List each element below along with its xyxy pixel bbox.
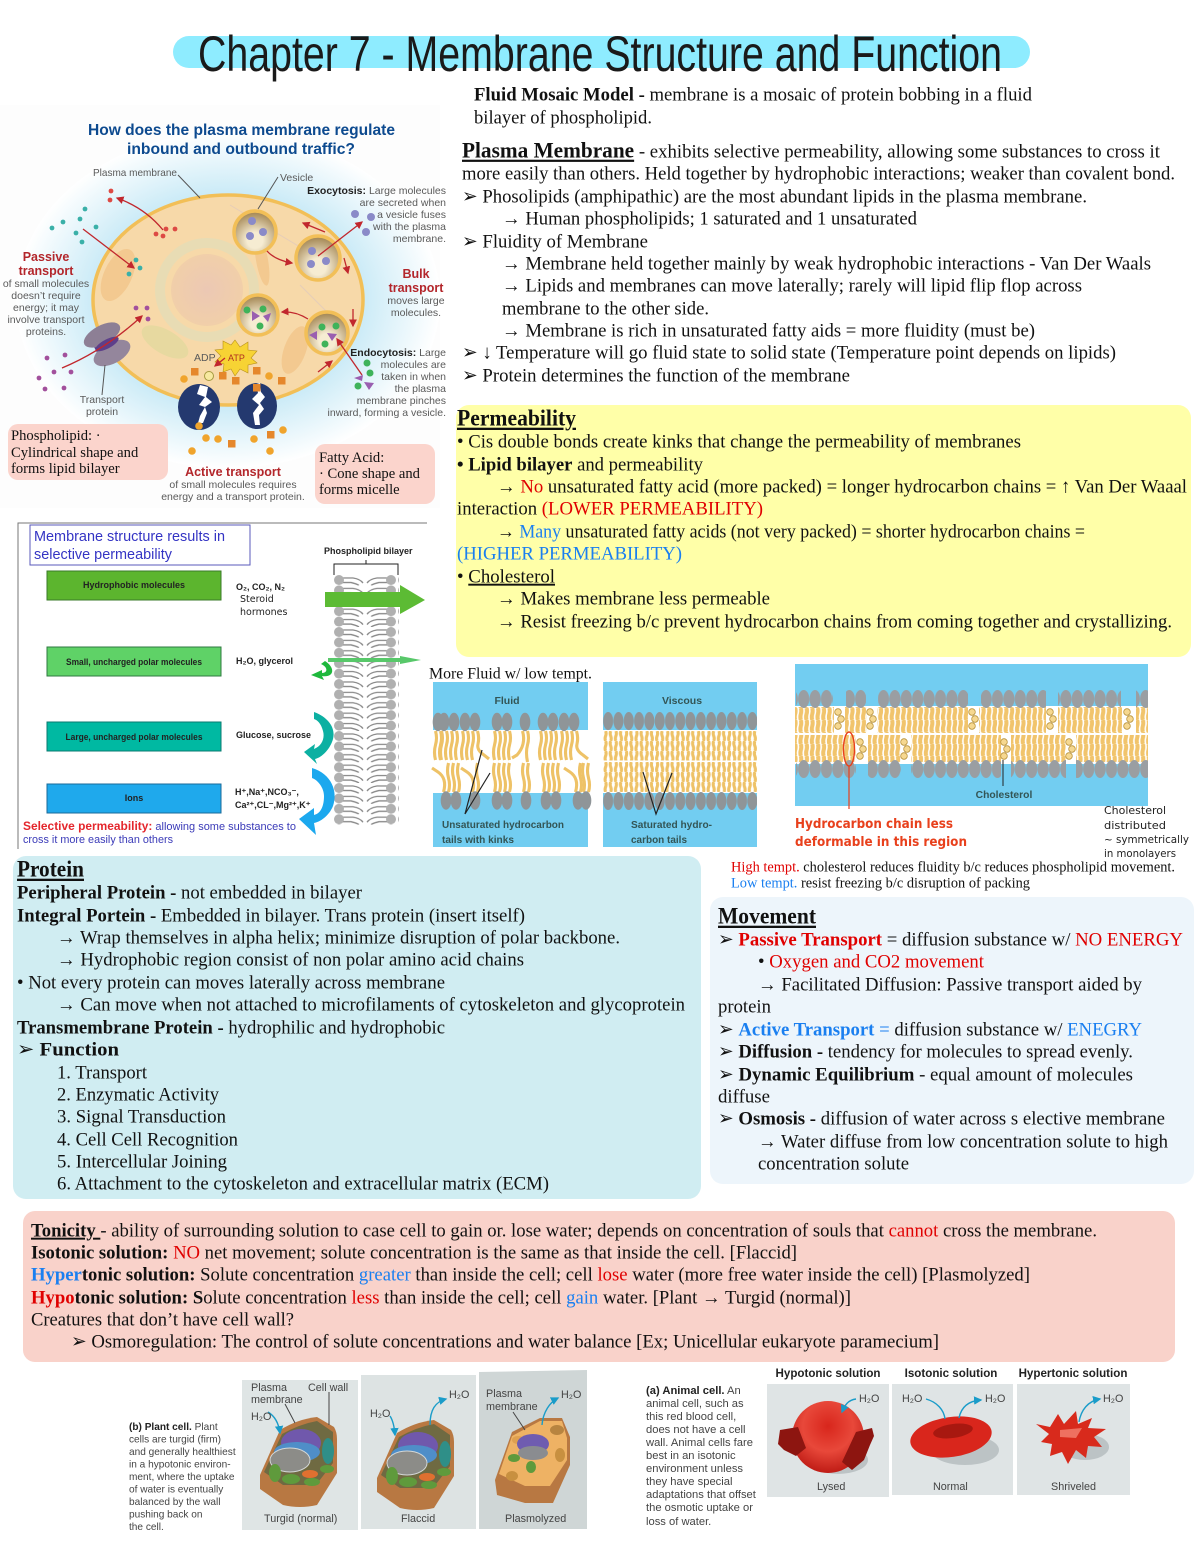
- diagram labels: molecules are: [381, 359, 446, 371]
- caption: animal cell: wall. Animal cells fare: [645, 1437, 753, 1449]
- caption: plant cell: the cell.: [129, 1522, 164, 1533]
- caption: animal cell: adaptations that offset: [646, 1489, 757, 1501]
- row: ions: Ca²⁺,CL⁻,Mg²⁺,K⁺: [235, 800, 311, 810]
- panel: permeability: → No unsaturated fatty acid (more packed) = longer hydrocarbon chains = ↑ Van Der Waaal: [497, 477, 1187, 498]
- panel: movement: → Water diffuse from low concentration solute to high: [758, 1132, 1168, 1153]
- panel: turgid cell: membrane: [251, 1394, 303, 1406]
- panel: permeability: (HIGHER PERMEABILITY): [457, 544, 682, 565]
- diagram labels: of small molecules: [3, 278, 89, 290]
- caption: selective permeability: [23, 821, 296, 846]
- heading: selective permeability box: selective permeability: [34, 547, 173, 563]
- diagram labels: are secreted when: [360, 197, 446, 209]
- panel: plasmolyzed cell: H₂O: [561, 1389, 581, 1401]
- callout: fatty acid: Fatty Acid:: [319, 450, 384, 466]
- diagram labels: Active transport: [185, 465, 282, 479]
- panel: permeability: • Cis double bonds create kinks that change the permeability of membranes: [457, 432, 1021, 453]
- caption: animal cell: they have special: [646, 1476, 732, 1488]
- panel: movement: concentration solute: [758, 1154, 909, 1175]
- diagram labels: membrane.: [393, 233, 446, 245]
- panel: turgid cell: Plasma: [251, 1382, 287, 1394]
- panel: tonicity: Isotonic solution: NO net movement; solute concentration is the same as that inside the cell. [Flaccid]: [31, 1243, 797, 1264]
- panel: protein: ➢ Function: [17, 1040, 119, 1061]
- label: cholesterol distributed: in monolayers: [1104, 848, 1176, 860]
- panel: movement: ➢ Osmosis - diffusion of water across s elective membrane: [718, 1109, 1165, 1130]
- heading: diagram question: [88, 122, 395, 158]
- text block: plasma membrane: → Lipids and membranes can move laterally; rarely will lipid flip flop across: [502, 276, 1082, 297]
- diagram labels: inward, forming a vesicle.: [328, 407, 446, 419]
- panel: movement: [710, 897, 1194, 1184]
- caption: animal cell: environment unless: [646, 1463, 743, 1475]
- diagram labels: Bulk: [402, 267, 430, 281]
- chart: selective permeability: [18, 523, 427, 849]
- diagram labels: Plasma membrane: [93, 167, 177, 179]
- panel: normal cell: H₂O: [985, 1393, 1005, 1405]
- heading: diagram question: inbound and outbound traffic?: [127, 141, 355, 158]
- diagram: fluid membrane: [432, 682, 591, 847]
- row: hydrophobic molecules: Hydrophobic molecules: [83, 580, 185, 590]
- caption: animal cell: loss of water.: [646, 1516, 711, 1528]
- column headings: Hypertonic solution: [1019, 1367, 1127, 1380]
- callout: phospholipid: Cylindrical shape and: [11, 445, 139, 461]
- row: hydrophobic molecules: hormones: [240, 607, 288, 618]
- diagram: viscous membrane: carbon tails: [631, 835, 687, 846]
- diagram labels: involve transport: [7, 314, 85, 326]
- arrow: passes through: [325, 585, 425, 614]
- panel: turgid cell: [242, 1380, 358, 1530]
- row: hydrophobic molecules: Steroid: [240, 594, 274, 605]
- text block: plasma membrane: [462, 138, 1175, 387]
- phospholipid bilayer column: [324, 546, 413, 825]
- panel: turgid cell: H₂O: [251, 1411, 271, 1423]
- diagram labels: proteins.: [26, 326, 66, 338]
- diagram labels: transport: [389, 281, 444, 295]
- text block: temperature notes: Low tempt. resist freezing b/c disruption of packing: [731, 876, 1031, 892]
- panel: permeability: • Lipid bilayer and permeability: [457, 455, 703, 476]
- diagram: cholesterol membrane: [795, 664, 1189, 860]
- gaps around cholesterol: [834, 706, 1136, 764]
- label: hydrocarbon chain: Hydrocarbon chain less: [795, 817, 953, 832]
- diagram labels: protein: [86, 406, 118, 418]
- diagram labels: Passive: [23, 250, 69, 264]
- panel: movement: protein: [718, 997, 771, 1018]
- vesicles: [234, 211, 348, 354]
- lipid tails and heads: [432, 713, 591, 810]
- diagram: fluid membrane: Fluid: [494, 695, 520, 707]
- panel: tonicity: ➢ Osmoregulation: The control of solute concentrations and water balance [Ex; Unicellular eukaryote paramecium]: [71, 1332, 939, 1353]
- callout: phospholipid: Phospholipid: ·: [11, 428, 101, 444]
- callout: phospholipid: [8, 424, 168, 480]
- panel: protein: Integral Portein - Embedded in bilayer. Trans protein (insert itself): [17, 906, 525, 927]
- panel: protein: 5. Intercellular Joining: [57, 1152, 227, 1173]
- text block: temperature notes: High tempt. cholesterol reduces fluidity b/c reduces phospholipid movement.: [731, 860, 1175, 876]
- diagram labels: doesn’t require: [11, 290, 81, 302]
- panel: tonicity: Hypotonic solution: Solute concentration less than inside the cell; cell gain water. [Plant → Turgid (normal)]: [31, 1288, 851, 1309]
- panel: protein: 1. Transport: [57, 1063, 148, 1084]
- panel: plasmolyzed cell: [479, 1370, 587, 1529]
- text block: plasma membrane: Plasma Membrane - exhibits selective permeability, allowing some substances to cross it: [462, 138, 1161, 163]
- panel: lysed cell: Lysed: [817, 1481, 845, 1493]
- panel: tonicity: Creatures that don’t have cell wall?: [31, 1310, 294, 1331]
- caption: selective permeability: Selective permeability: allowing some substances to: [23, 821, 296, 833]
- label: cholesterol distributed: Cholesterol: [1104, 805, 1166, 817]
- cholesterol molecules: [835, 709, 1133, 759]
- diagram labels: moves large: [387, 295, 445, 307]
- panel: plasmolyzed cell: Plasma: [486, 1388, 522, 1400]
- diagram labels: a vesicle fuses: [377, 209, 446, 221]
- panel: flaccid cell: Flaccid: [401, 1513, 435, 1525]
- text block: fluid mosaic model: Fluid Mosaic Model - membrane is a mosaic of protein bobbing in a fluid: [474, 84, 1032, 105]
- panel: protein: • Not every protein can moves laterally across membrane: [17, 973, 445, 994]
- label: cholesterol distributed: [1104, 805, 1189, 860]
- diagram labels: the plasma: [395, 383, 446, 395]
- row: small uncharged polar: H₂O, glycerol: [236, 656, 293, 666]
- diagram labels: Exocytosis: Large molecules: [307, 185, 446, 197]
- caption: plant cell: [129, 1422, 236, 1533]
- cell body: [93, 195, 363, 405]
- caption: animal cell: does not have a cell: [646, 1424, 746, 1436]
- panel: movement: • Oxygen and CO2 movement: [758, 952, 985, 973]
- panel: protein: Peripheral Protein - not embedded in bilayer: [17, 883, 363, 904]
- arrow: green deflect: [311, 661, 332, 680]
- diagram: plant cells: [129, 1370, 587, 1533]
- text block: plasma membrane: ➢ Fluidity of Membrane: [462, 232, 648, 253]
- caption: plant cell: ment, where the uptake: [129, 1472, 235, 1483]
- diagram labels: ATP: [228, 353, 245, 363]
- caption: animal cell: (a) Animal cell. An: [646, 1385, 741, 1397]
- panel: turgid cell: Turgid (normal): [264, 1513, 337, 1525]
- heading: permeability: Permeability: [457, 406, 576, 431]
- panel: lysed cell: [767, 1384, 889, 1497]
- panel: flaccid cell: H₂O: [370, 1408, 390, 1420]
- callout: fatty acid: · Cone shape and: [319, 466, 421, 482]
- caption: animal cell: animal cell, such as: [646, 1398, 744, 1410]
- panel: permeability: • Cholesterol: [457, 567, 555, 588]
- label: hydrocarbon chain: [795, 817, 967, 850]
- panel: protein: 4. Cell Cell Recognition: [57, 1130, 238, 1151]
- panel: movement: ➢ Passive Transport = diffusion substance w/ NO ENERGY: [718, 930, 1183, 951]
- panel: permeability: [456, 405, 1191, 657]
- panel: tonicity: Tonicity - ability of surrounding solution to case cell to gain or. lose water; depends on concentration of souls that cannot cross the membrane.: [31, 1221, 1097, 1242]
- cargo molecules: [244, 210, 375, 390]
- text block: plasma membrane: → Membrane is rich in unsaturated fatty aids = more fluidity (must be): [502, 321, 1035, 342]
- caption: plant cell: pushing back on: [129, 1510, 203, 1520]
- text block: plasma membrane: ➢ ↓ Temperature will go fluid state to solid state (Temperature point depends on lipids): [462, 343, 1116, 364]
- row: large uncharged polar: Glucose, sucrose: [236, 730, 311, 740]
- lipid heads: [796, 690, 1148, 778]
- diagram labels: Endocytosis: Large: [350, 347, 446, 359]
- panel: protein: → Can move when not attached to microfilaments of cytoskeleton and glycoprotein: [57, 995, 685, 1016]
- diagram labels: taken in when: [381, 371, 446, 383]
- panel: movement: ➢ Diffusion - tendency for molecules to spread evenly.: [718, 1042, 1133, 1063]
- arrows: red transport arrows: [62, 198, 362, 375]
- text block: fluid mosaic model: [474, 84, 1032, 128]
- diagram labels: with the plasma: [372, 221, 446, 233]
- leader lines: [178, 175, 278, 209]
- column headings: [776, 1367, 1127, 1380]
- diagram: viscous membrane: [603, 682, 757, 847]
- diagram: fluid membrane: Unsaturated hydrocarbon: [442, 820, 564, 831]
- row: hydrophobic molecules: [47, 571, 288, 618]
- panel: protein: 2. Enzymatic Activity: [57, 1085, 219, 1106]
- diagram labels: ADP: [194, 352, 216, 364]
- arrow: small polar partial: [328, 656, 421, 664]
- diagram: plasma membrane traffic: [0, 105, 446, 508]
- text block: plasma membrane: more easily than others. Held together by hydrophobic interactions; weaker than covalent bond.: [462, 164, 1175, 185]
- heading: movement: Movement: [718, 904, 816, 929]
- text block: plasma membrane: ➢ Protein determines the function of the membrane: [462, 366, 850, 387]
- diagram labels: Transport: [80, 394, 124, 406]
- heading: protein: Protein: [17, 857, 84, 882]
- diagram: fluid membrane: tails with kinks: [442, 835, 514, 846]
- heading: selective permeability box: [30, 525, 250, 565]
- diagram labels: energy and a transport protein.: [161, 491, 305, 503]
- diagram labels: energy; it may: [13, 302, 80, 314]
- row: small uncharged polar: [47, 647, 293, 676]
- label: cholesterol distributed: distributed: [1104, 820, 1166, 832]
- caption: plant cell: cells are turgid (firm): [129, 1434, 221, 1446]
- heading: selective permeability box: Membrane structure results in: [34, 529, 225, 545]
- panel: movement: ➢ Dynamic Equilibrium - equal amount of molecules: [718, 1065, 1133, 1086]
- diagram: animal cells: [645, 1367, 1130, 1528]
- panel: permeability: → Resist freezing b/c prevent hydrocarbon chains from coming together and crystallizing.: [497, 612, 1172, 633]
- panel: normal cell: Normal: [933, 1481, 968, 1493]
- diagram labels: of small molecules requires: [169, 479, 297, 491]
- panel: shriveled cell: Shriveled: [1051, 1481, 1096, 1493]
- caption: animal cell: the osmotic uptake or: [646, 1502, 753, 1514]
- small molecules: passive transport: [37, 189, 177, 391]
- panel: plasmolyzed cell: Plasmolyzed: [505, 1513, 566, 1525]
- heading: diagram question: How does the plasma membrane regulate: [88, 122, 395, 139]
- panel: normal cell: [892, 1384, 1013, 1495]
- row: ions: [47, 784, 311, 813]
- panel: normal cell: H₂O: [902, 1393, 922, 1405]
- diagram: viscous membrane: Saturated hydro-: [631, 820, 713, 831]
- caption: animal cell: [645, 1385, 757, 1528]
- panel: tonicity: Hypertonic solution: Solute concentration greater than inside the cell; cell lose water (more free water inside the cell) [Plasmolyzed]: [31, 1265, 1030, 1286]
- diagram labels: Vesicle: [280, 172, 313, 184]
- diagram labels: transport: [19, 264, 74, 278]
- row: large uncharged polar: Large, uncharged polar molecules: [66, 732, 202, 742]
- panel: plasmolyzed cell: membrane: [486, 1401, 538, 1413]
- panel: flaccid cell: [361, 1375, 476, 1529]
- diagram labels: molecules.: [391, 307, 441, 319]
- caption: plant cell: (b) Plant cell. Plant: [129, 1422, 218, 1433]
- title: Chapter 7 - Membrane Structure and Function: [198, 26, 1002, 82]
- arrow: teal deflect: [304, 712, 334, 764]
- panel: movement: diffuse: [718, 1087, 770, 1108]
- caption: plant cell: balanced by the wall: [129, 1497, 220, 1508]
- panel: permeability: interaction (LOWER PERMEABILITY): [457, 499, 763, 520]
- text block: plasma membrane: → Human phospholipids; 1 saturated and 1 unsaturated: [502, 209, 917, 230]
- panel: protein: 3. Signal Transduction: [57, 1107, 226, 1128]
- panel: permeability: → Makes membrane less permeable: [497, 589, 770, 610]
- label: hydrocarbon chain: deformable in this region: [795, 835, 967, 850]
- panel: shriveled cell: H₂O: [1103, 1393, 1123, 1405]
- panel: protein: 6. Attachment to the cytoskeleton and extracellular matrix (ECM): [57, 1174, 549, 1195]
- panel: lysed cell: H₂O: [859, 1393, 879, 1405]
- caption: animal cell: best in an isotonic: [646, 1450, 736, 1462]
- label: more fluid: More Fluid w/ low tempt.: [429, 664, 592, 683]
- panel: protein: Transmembrane Protein - hydrophilic and hydrophobic: [17, 1018, 445, 1039]
- diagram: viscous membrane: Viscous: [662, 695, 702, 707]
- panel: protein: [13, 856, 701, 1199]
- panel: turgid cell: Cell wall: [308, 1382, 348, 1394]
- caption: plant cell: and generally healthiest: [129, 1447, 236, 1458]
- caption: plant cell: in a hypotonic environ-: [129, 1460, 231, 1470]
- caption: animal cell: this red blood cell,: [646, 1411, 736, 1423]
- callout: phospholipid: forms lipid bilayer: [11, 461, 120, 477]
- row: small uncharged polar: Small, uncharged polar molecules: [66, 657, 202, 667]
- panel: movement: ➢ Active Transport = diffusion substance w/ ENEGRY: [718, 1020, 1142, 1041]
- caption: plant cell: of water is eventually: [129, 1484, 224, 1496]
- panel: shriveled cell: [1017, 1384, 1130, 1495]
- panel: flaccid cell: H₂O: [449, 1389, 469, 1401]
- label: cholesterol distributed: ~ symmetrically: [1104, 834, 1189, 846]
- panel: movement: → Facilitated Diffusion: Passive transport aided by: [758, 975, 1142, 996]
- phospholipid bilayer column: Phospholipid bilayer: [324, 546, 413, 556]
- diagram labels: membrane pinches: [357, 395, 446, 407]
- row: ions: H⁺,Na⁺,NCO₃⁻,: [235, 787, 299, 797]
- diagram: cholesterol membrane: Cholesterol: [976, 790, 1032, 801]
- text block: plasma membrane: → Membrane held together mainly by weak hydrophobic interactions - Van Der Waals: [502, 254, 1151, 275]
- row: large uncharged polar: [47, 722, 311, 751]
- panel: permeability: → Many unsaturated fatty acids (not very packed) = shorter hydrocarbon chains =: [497, 522, 1085, 543]
- text block: plasma membrane: ➢ Phosolipids (amphipathic) are the most abundant lipids in the plasma membrane.: [462, 187, 1087, 208]
- icon: atp pumps: [178, 340, 287, 455]
- text block: fluid mosaic model: bilayer of phospholipid.: [474, 107, 652, 128]
- column headings: Isotonic solution: [905, 1367, 997, 1380]
- caption: selective permeability: cross it more easily than others: [23, 834, 173, 846]
- panel: protein: → Wrap themselves in alpha helix; minimize disruption of polar backbone.: [57, 928, 620, 949]
- callout: fatty acid: forms micelle: [319, 482, 400, 498]
- row: hydrophobic molecules: O₂, CO₂, N₂: [236, 582, 285, 592]
- panel: protein: → Hydrophobic region consist of non polar amino acid chains: [57, 950, 524, 971]
- panel: tonicity: [23, 1211, 1175, 1362]
- column headings: Hypotonic solution: [776, 1367, 880, 1380]
- text block: plasma membrane: membrane to the other side.: [502, 299, 709, 320]
- arrow: blue deflect: [299, 768, 335, 835]
- callout: fatty acid: [315, 444, 435, 504]
- icon: transport protein: [80, 317, 135, 395]
- row: ions: Ions: [125, 793, 143, 803]
- text block: temperature notes: [731, 860, 1175, 892]
- diagram labels: [3, 167, 446, 503]
